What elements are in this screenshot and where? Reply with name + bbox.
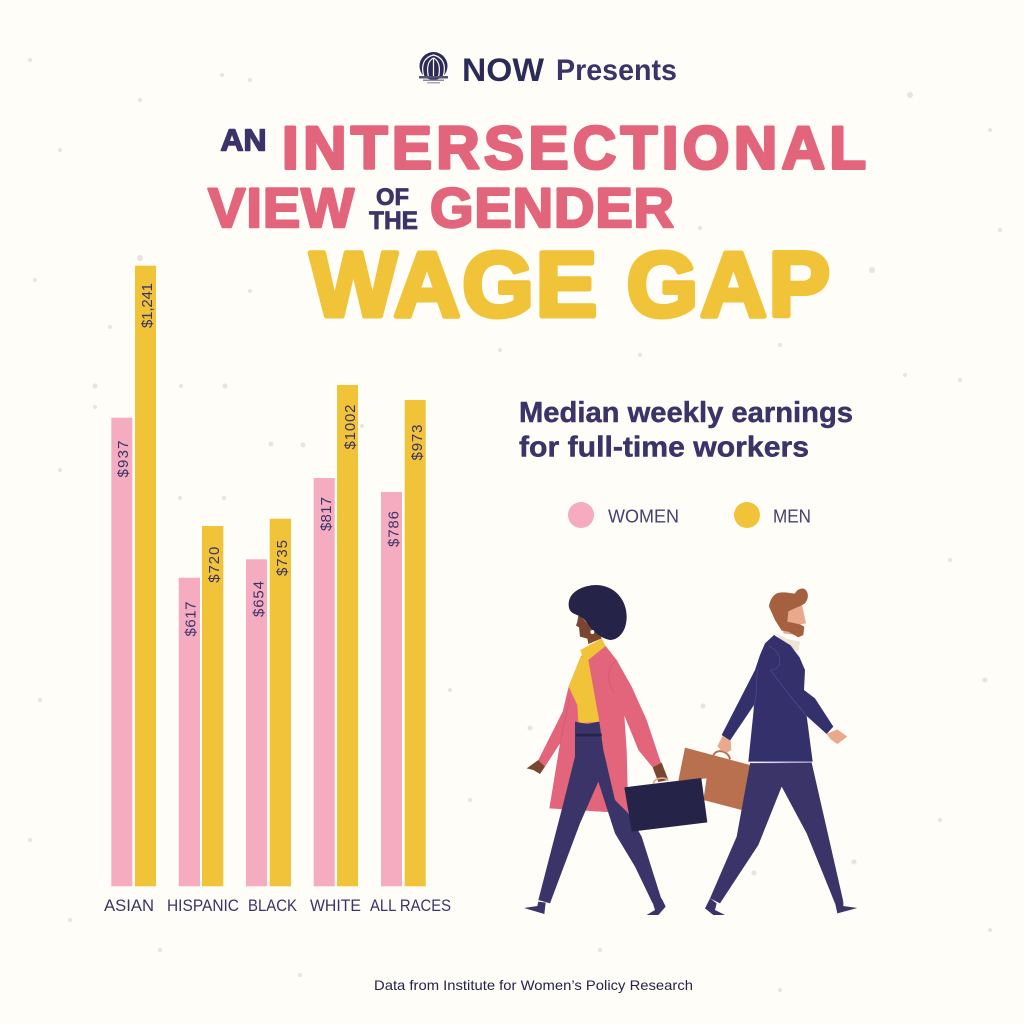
title word: GENDER: GENDER	[430, 176, 674, 239]
header: NOW Presents	[419, 52, 677, 88]
group: Hispanic: $720	[206, 547, 223, 583]
title word: OF: OF	[376, 184, 409, 211]
subtitle: median weekly earnings: for full-time workers	[519, 432, 809, 464]
woman's briefcase	[624, 778, 707, 832]
figure: man	[705, 589, 857, 915]
title word: THE: THE	[369, 207, 418, 235]
group: White	[310, 385, 361, 915]
NOW wordmark: NOW	[462, 52, 545, 88]
title word: INTERSECTIONAL: INTERSECTIONAL	[282, 114, 866, 182]
title word: AN: AN	[220, 122, 266, 158]
source note: Data from Institute for Women’s Policy Research	[374, 977, 693, 993]
group: Black: $735	[274, 540, 291, 576]
title	[208, 114, 866, 336]
group: White: $817	[318, 497, 335, 531]
group: Hispanic	[167, 526, 239, 915]
group: Black: $654	[250, 581, 268, 617]
group: All races: $786	[386, 511, 402, 547]
man's briefcase	[678, 748, 750, 810]
legend: MEN	[773, 506, 811, 526]
group: All races	[370, 400, 451, 915]
bar chart	[104, 266, 451, 915]
title word: VIEW: VIEW	[208, 176, 354, 239]
title words: WAGE GAP: WAGE GAP	[310, 234, 830, 336]
subtitle: median weekly earnings	[519, 397, 853, 464]
group: Asian: $1,241	[139, 283, 156, 328]
group: All races: $973	[409, 424, 426, 460]
group: White: WHITE	[310, 897, 361, 915]
group: Asian: $937	[115, 440, 132, 478]
group: Black: BLACK	[248, 897, 297, 915]
subtitle: median weekly earnings: Median weekly earnings	[519, 397, 853, 429]
group: White: $1002	[342, 404, 359, 450]
figure: woman	[524, 585, 668, 915]
group: Asian: ASIAN	[104, 897, 154, 915]
illustration: walking woman and man	[524, 585, 857, 915]
icon: NOW logo	[419, 52, 448, 84]
group: All races: ALL RACES	[370, 897, 451, 915]
group: Hispanic: $617	[182, 602, 200, 636]
group: Hispanic: HISPANIC	[167, 897, 239, 915]
group: Black	[246, 519, 297, 915]
legend	[568, 502, 811, 528]
Presents: Presents	[556, 54, 677, 87]
group: Asian	[104, 266, 156, 915]
legend: WOMEN	[608, 506, 679, 526]
